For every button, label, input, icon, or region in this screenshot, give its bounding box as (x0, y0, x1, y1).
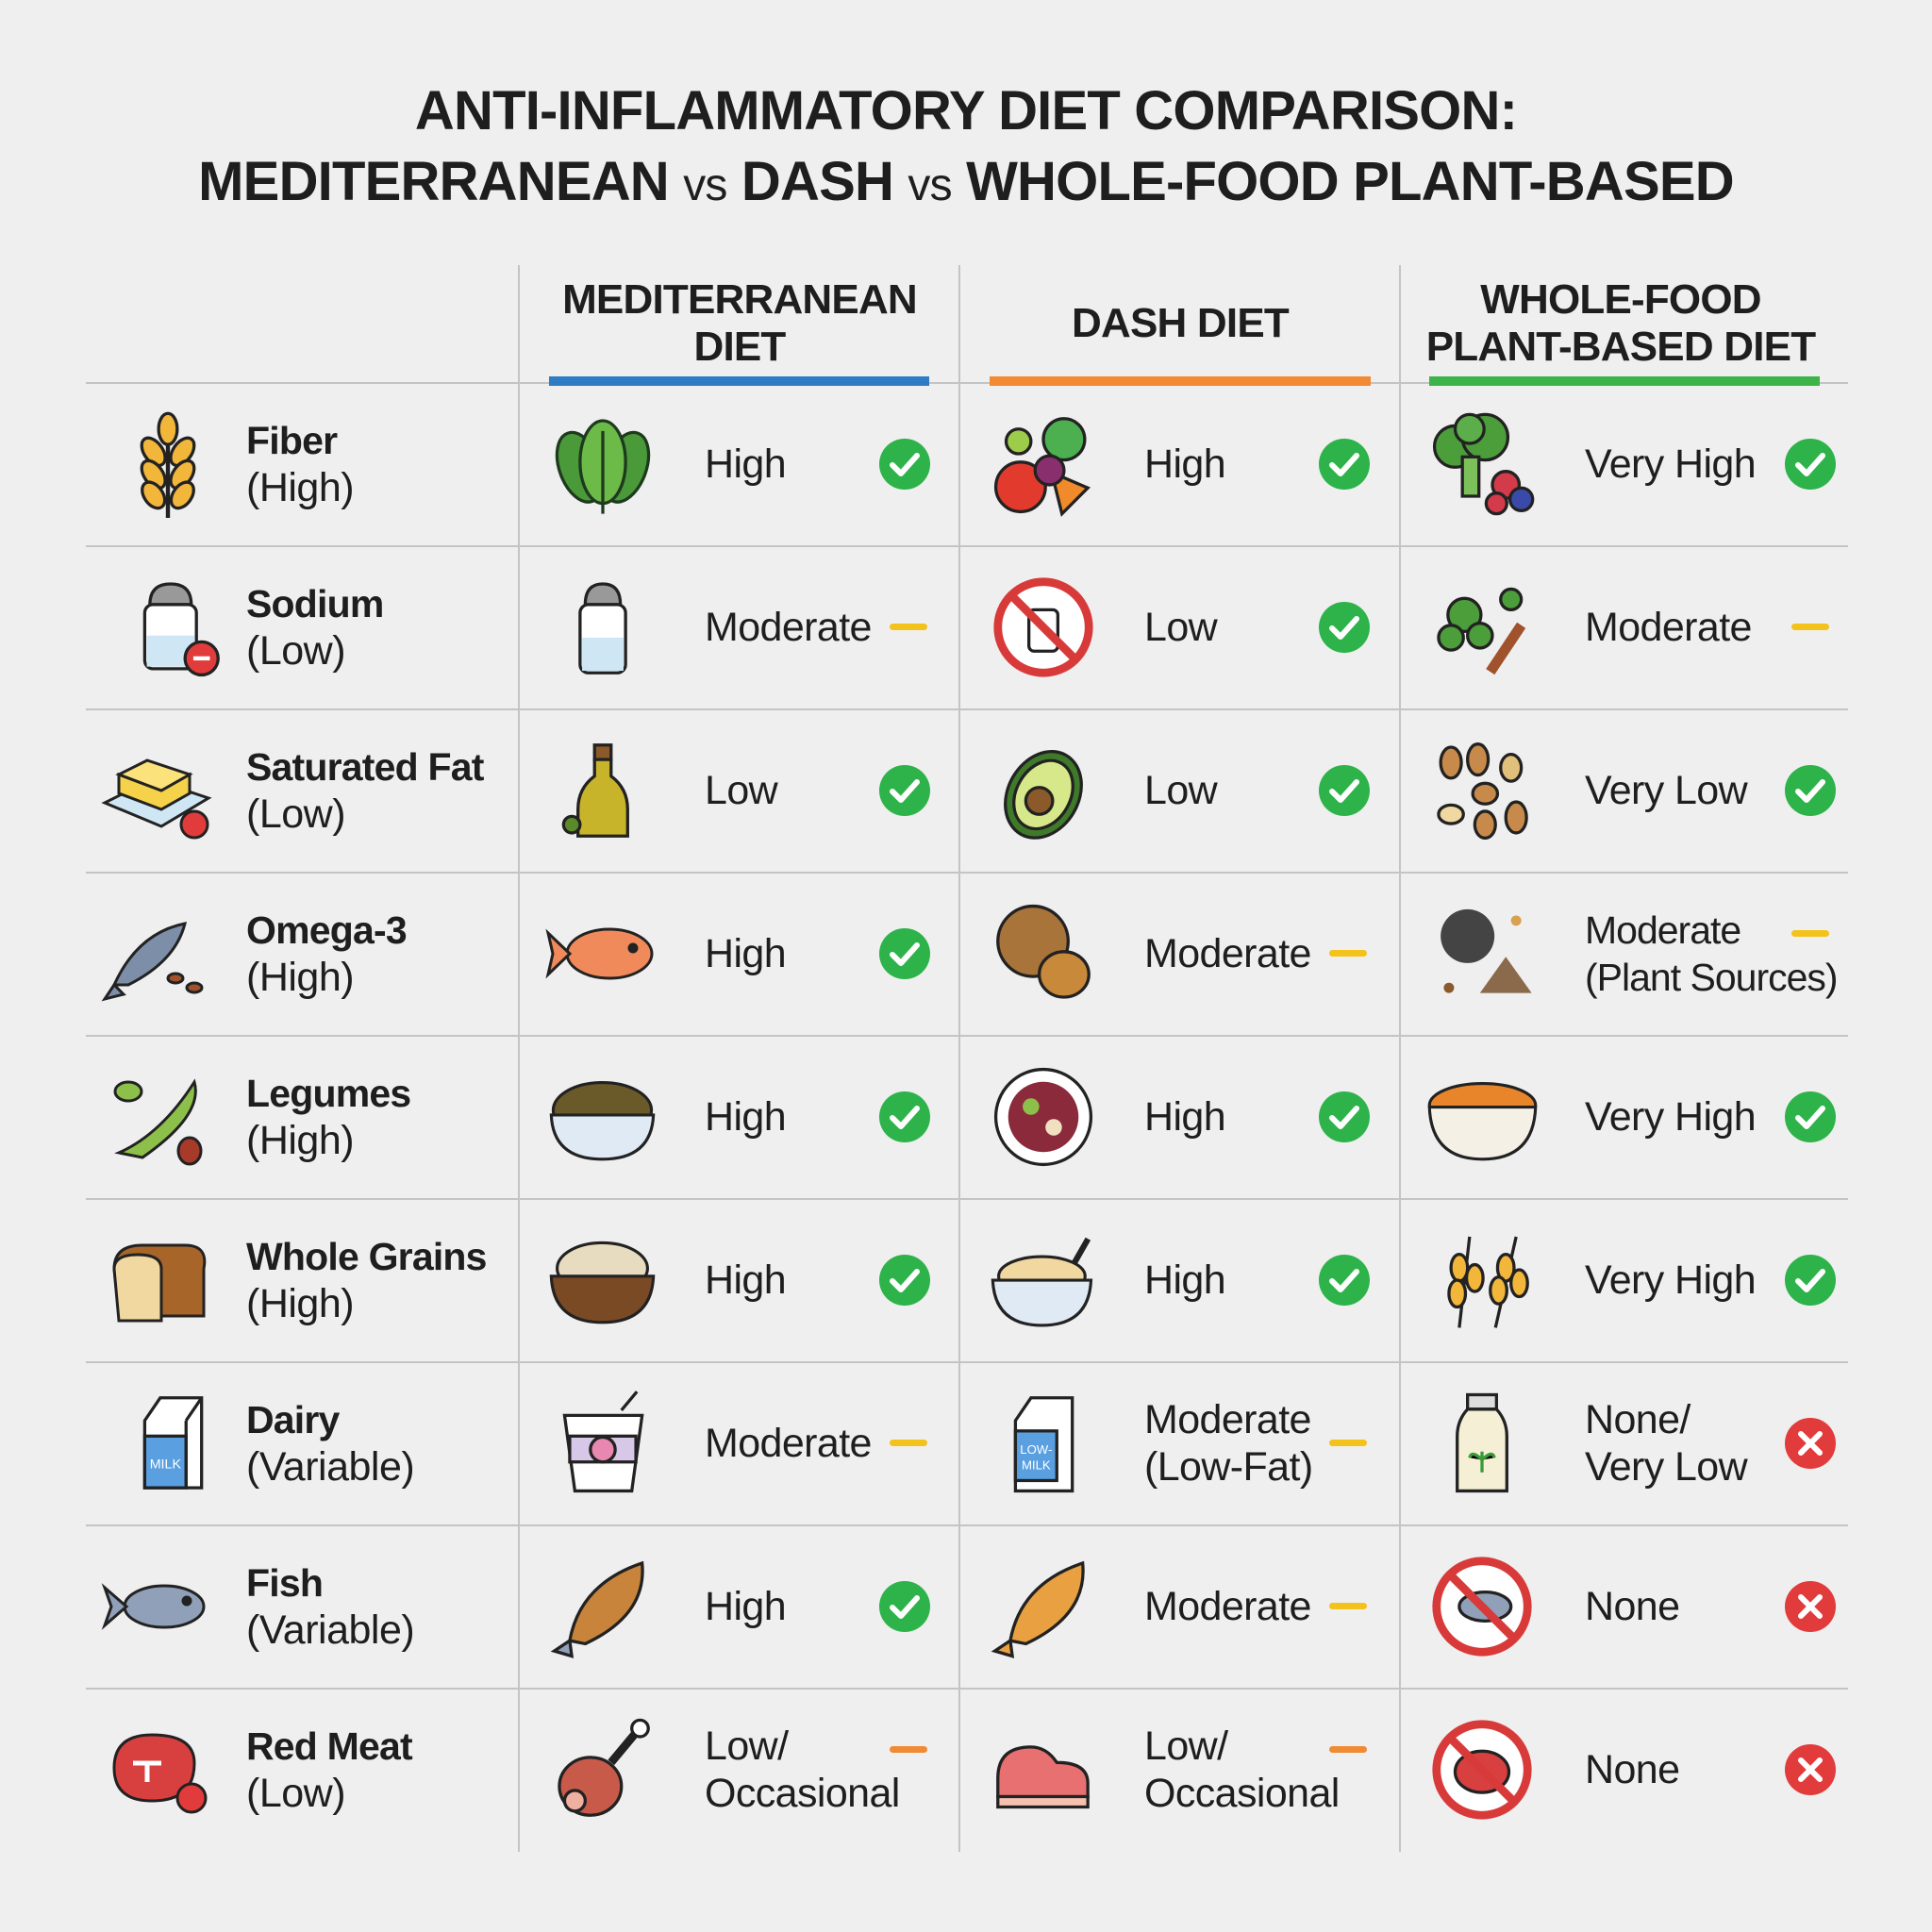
med status (879, 928, 930, 979)
dash text: Low (1144, 768, 1217, 813)
dash icon (1004, 750, 1083, 840)
label: (Variable) (246, 1443, 414, 1489)
wfpb icon (1437, 587, 1526, 675)
label (246, 908, 407, 1000)
med text (705, 1688, 900, 1851)
row: fiber (140, 411, 1836, 518)
title: ANTI-INFLAMMATORY DIET COMPARISON: (415, 80, 1517, 142)
label (246, 1524, 414, 1688)
dash status (1329, 950, 1367, 957)
row: sodium (143, 577, 1829, 677)
dash status (1319, 602, 1370, 653)
dash status (1319, 765, 1370, 816)
wfpb icon (1428, 1553, 1536, 1660)
icon: wheat (140, 411, 196, 518)
med text: High (705, 1257, 786, 1302)
label: Legumes (246, 1072, 410, 1115)
dash text: Low/ (1144, 1723, 1227, 1768)
dash status (1318, 1254, 1371, 1307)
wfpb icon (1432, 413, 1534, 515)
icon: steak (105, 1716, 213, 1824)
wfpb text: Very High (1585, 1257, 1756, 1302)
icon: peas (113, 1079, 202, 1166)
wfpb status (1785, 765, 1836, 816)
label (246, 745, 484, 836)
med text: Moderate (705, 1421, 872, 1466)
label (246, 1198, 487, 1361)
label: (High) (246, 464, 354, 509)
label: Fish (246, 1560, 323, 1604)
med text: Occasional (705, 1770, 900, 1815)
wfpb text: Moderate (1585, 604, 1752, 649)
title: MEDITERRANEAN vs DASH vs WHOLE-FOOD PLANT-BASED (198, 151, 1734, 212)
med text: Low (705, 768, 777, 813)
dash text: High (1144, 441, 1225, 487)
label: Red Meat (246, 1724, 412, 1768)
wfpb text (1585, 908, 1838, 998)
wfpb text: None/ (1585, 1396, 1690, 1441)
wfpb status (1784, 1580, 1837, 1633)
label (246, 1688, 412, 1851)
icon: milk carton (119, 1390, 226, 1497)
label: Omega-3 (246, 908, 407, 951)
dash icon (996, 904, 1091, 999)
med icon (543, 1226, 661, 1334)
dash text (1144, 1688, 1340, 1851)
header: mediterranean: DIET (693, 324, 785, 370)
med status (879, 765, 930, 816)
dash status (1318, 1091, 1371, 1143)
dash icon (990, 1553, 1097, 1660)
wfpb icon (1428, 1226, 1536, 1334)
label: (High) (246, 1281, 354, 1326)
dash icon (990, 1716, 1097, 1824)
label: (High) (246, 1117, 354, 1162)
label (246, 1072, 410, 1162)
row: red meat (86, 1688, 1848, 1851)
label: Whole Grains (246, 1234, 487, 1277)
header: wfpb: WHOLE-FOOD (1480, 276, 1761, 323)
dash status (1329, 1746, 1367, 1753)
header: dash: DASH DIET (1072, 300, 1289, 346)
label: (Low) (246, 628, 345, 674)
icon: fish and seeds (102, 922, 204, 1002)
accent bar green (1429, 376, 1820, 386)
dash status (1329, 1440, 1367, 1446)
wfpb icon (1437, 742, 1528, 840)
dash text: Moderate (1144, 1396, 1311, 1441)
med text: High (705, 930, 786, 975)
wfpb text: Very High (1585, 1094, 1756, 1140)
wfpb status (1791, 930, 1829, 937)
dash icon (990, 1390, 1097, 1497)
row: dairy (86, 1361, 1848, 1524)
header: wfpb: PLANT-BASED DIET (1426, 324, 1815, 370)
med status (890, 1746, 927, 1753)
wfpb text (1585, 1361, 1747, 1524)
med icon (578, 582, 627, 675)
label (246, 1361, 414, 1524)
dash status (1319, 439, 1370, 490)
label: Dairy (246, 1398, 340, 1441)
med status (890, 624, 927, 630)
icon: salt shaker (143, 582, 220, 677)
dash status (1329, 1603, 1367, 1609)
row: omega-3 (102, 904, 1838, 1002)
med icon (549, 1553, 657, 1660)
med text: Low/ (705, 1723, 788, 1768)
label: Saturated Fat (246, 745, 484, 789)
label: Fiber (246, 419, 337, 462)
dash text: High (1144, 1094, 1225, 1140)
dash icon (994, 417, 1091, 517)
wfpb text: None (1585, 1583, 1679, 1628)
label: (High) (246, 955, 354, 1000)
row: saturated fat (102, 742, 1836, 840)
wfpb text: None (1585, 1747, 1679, 1792)
dash icon (993, 577, 1093, 677)
wfpb status (1791, 624, 1829, 630)
label: (Variable) (246, 1607, 414, 1653)
label: (Low) (246, 791, 345, 836)
row: whole grains (86, 1198, 1848, 1361)
wfpb text: (Plant Sources) (1585, 955, 1838, 998)
dash text: High (1144, 1257, 1225, 1302)
label (246, 419, 354, 509)
dash text: Moderate (1144, 930, 1311, 975)
med icon (549, 1390, 657, 1497)
dash text: (Low-Fat) (1144, 1443, 1313, 1489)
icon: fish (100, 1553, 213, 1660)
wfpb text: Very Low (1585, 1443, 1747, 1489)
dash text: Moderate (1144, 1583, 1311, 1628)
med icon (549, 1716, 657, 1824)
row: fish (86, 1524, 1848, 1688)
med status (878, 1091, 931, 1143)
wfpb text: Very Low (1585, 768, 1747, 813)
med status (890, 1440, 927, 1446)
label (246, 581, 384, 674)
title (198, 80, 1734, 212)
med status (878, 1254, 931, 1307)
dash text (1144, 1361, 1313, 1524)
wfpb status (1784, 1091, 1837, 1143)
med text: High (705, 441, 786, 487)
med text: High (705, 1583, 786, 1628)
label: (Low) (246, 1770, 345, 1815)
icon: butter (102, 758, 211, 840)
dash icon: MILK (1022, 1457, 1051, 1472)
med status (878, 1580, 931, 1633)
med icon (562, 743, 629, 838)
med icon (549, 1081, 655, 1160)
header: mediterranean (562, 276, 917, 370)
wfpb status (1785, 439, 1836, 490)
wfpb icon (1441, 909, 1532, 993)
dash text: Occasional (1144, 1770, 1340, 1815)
wfpb status (1784, 1743, 1837, 1796)
icon: bread (105, 1226, 213, 1334)
wfpb text: Moderate (1585, 908, 1740, 951)
med text: High (705, 1094, 786, 1140)
header: wfpb (1426, 276, 1816, 370)
wfpb status (1784, 1417, 1837, 1470)
wfpb icon (1428, 1390, 1536, 1497)
med icon (545, 928, 653, 979)
dash icon (985, 1226, 1103, 1334)
icon: milk carton: MILK (150, 1457, 181, 1472)
accent bar blue (549, 376, 929, 386)
dash text: Low (1144, 604, 1217, 649)
wfpb status (1784, 1254, 1837, 1307)
wfpb icon (1428, 1716, 1536, 1824)
accent bar orange (990, 376, 1371, 386)
header: mediterranean: MEDITERRANEAN (562, 276, 917, 323)
med icon (555, 419, 651, 514)
wfpb text: Very High (1585, 441, 1756, 487)
dash icon: LOW- (1020, 1442, 1052, 1457)
med text: Moderate (705, 604, 872, 649)
row: legumes (113, 1068, 1836, 1166)
label: Sodium (246, 581, 384, 625)
med status (879, 439, 930, 490)
wfpb icon (1424, 1063, 1541, 1171)
dash icon (990, 1063, 1097, 1171)
